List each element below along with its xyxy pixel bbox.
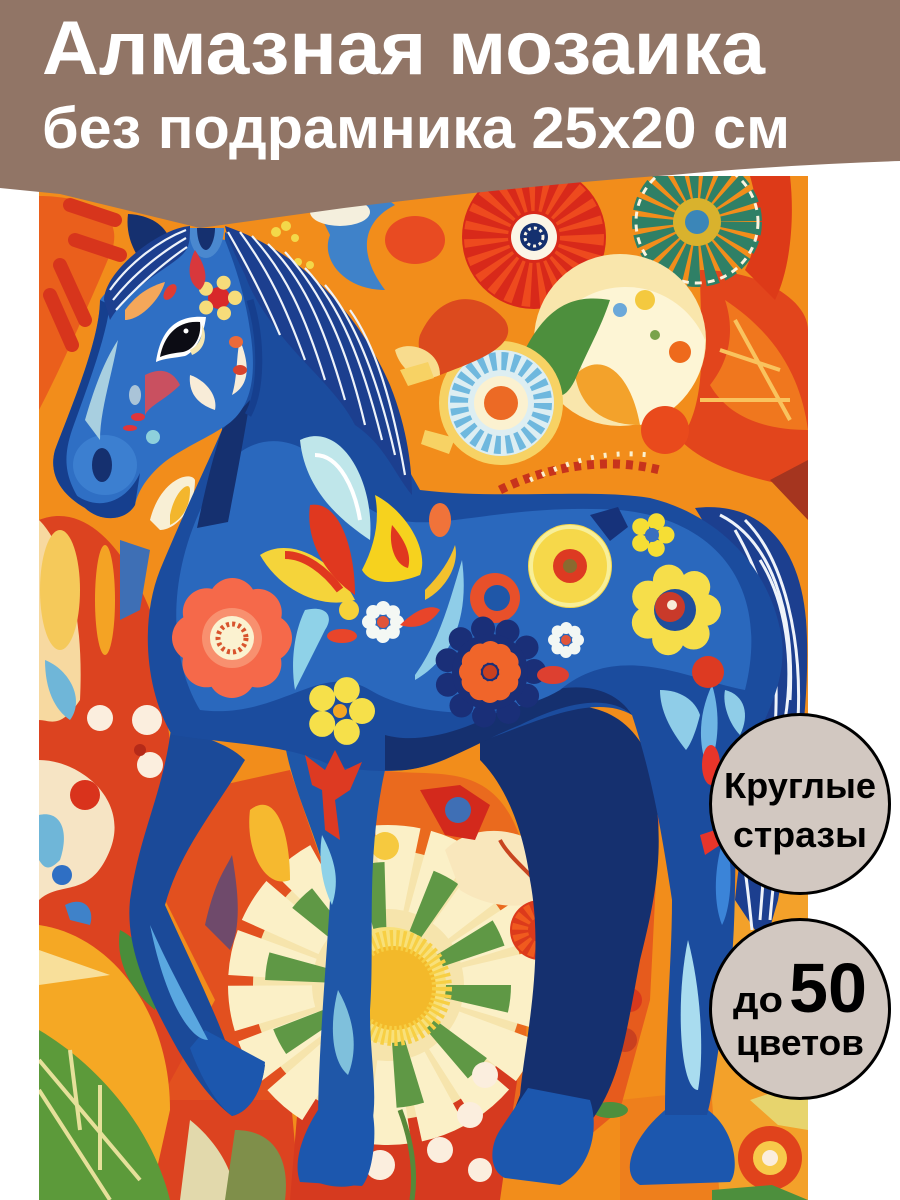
lower middle ornaments — [205, 785, 570, 960]
eye — [156, 317, 206, 362]
big cream daisy — [253, 850, 523, 1120]
tail — [695, 507, 807, 945]
head outline band — [248, 300, 259, 415]
neck shadow — [197, 400, 250, 528]
painting: folk-art blue horse — [39, 161, 808, 1200]
subtitle: без подрамника 25х20 см — [42, 96, 790, 161]
white small flowers — [554, 507, 628, 652]
far ear — [128, 214, 167, 253]
badge: up to 50 colors: до — [733, 979, 783, 1020]
mane — [225, 226, 412, 495]
shoulder ornaments — [327, 545, 464, 680]
horse body — [148, 232, 783, 1115]
badge: round rhinestones: стразы — [733, 814, 867, 855]
leg light panel — [681, 940, 701, 1090]
badge: up to 50 colors: цветов — [736, 1022, 864, 1063]
far hind leg — [480, 708, 659, 1118]
light leg stripe — [320, 835, 336, 905]
yellow five-petal flower on leg — [318, 689, 362, 733]
red leaf cluster — [419, 299, 508, 375]
badge: round rhinestones — [710, 714, 890, 894]
horse head — [53, 232, 253, 518]
cream moon — [534, 254, 706, 426]
light blue petal flower — [660, 656, 745, 770]
far front bent leg — [129, 720, 265, 1116]
tulip ornament — [260, 495, 451, 690]
top banner — [0, 0, 900, 228]
blue crescent — [324, 202, 395, 290]
muzzle — [72, 435, 140, 518]
red daisy — [462, 182, 606, 309]
green leaf spray — [525, 298, 610, 396]
yellow ring flower — [528, 524, 612, 608]
hock red ornaments — [700, 745, 731, 925]
red leg flower — [305, 750, 362, 840]
round blue flower — [439, 341, 563, 465]
top flowers and moon ornaments — [310, 161, 808, 520]
painting background — [39, 176, 808, 1200]
inner ear — [197, 228, 215, 250]
hind hoof — [492, 1088, 594, 1185]
belly highlight — [176, 441, 751, 712]
near hind hoof — [630, 1110, 735, 1185]
red ring ornament — [470, 573, 520, 623]
forelock — [104, 226, 190, 320]
green flower — [636, 161, 758, 283]
head dark front edge — [53, 300, 110, 508]
near leg light stripe — [333, 990, 354, 1075]
belly dark shade — [385, 687, 632, 771]
coral chest flower — [196, 602, 268, 674]
bottom ornaments — [365, 988, 808, 1200]
light stripe on bent leg — [150, 925, 208, 1040]
near front leg — [285, 745, 385, 1187]
speckled garland — [500, 464, 660, 490]
left side ornaments — [39, 476, 286, 1200]
badge: up to 50 colors — [710, 920, 890, 1098]
near ear — [189, 228, 224, 258]
orange leaves right — [710, 300, 808, 430]
navy orange flower — [446, 628, 569, 716]
badge: round rhinestones: Круглые — [724, 765, 876, 806]
small yellow flower — [638, 521, 666, 549]
neck feather plume — [300, 436, 370, 540]
title: Алмазная мозаика — [42, 6, 766, 91]
badge: up to 50 colors: 50 — [789, 949, 867, 1027]
head decorations — [85, 250, 247, 444]
near leg hoof — [298, 1110, 374, 1186]
bent leg hoof — [190, 1030, 265, 1116]
big yellow scalloped flower — [645, 580, 705, 640]
